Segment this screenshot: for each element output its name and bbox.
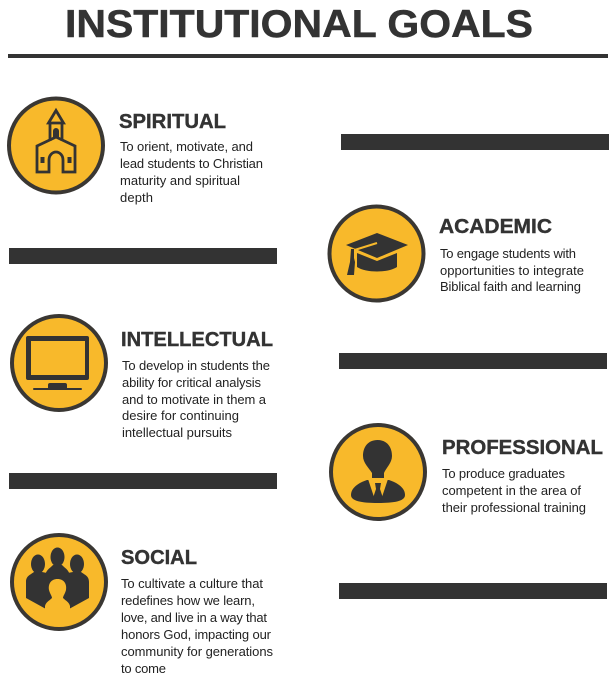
title: INSTITUTIONAL GOALS [65, 3, 533, 46]
panel: spiritual [9, 98, 263, 205]
description: their professional training [442, 500, 586, 515]
description: honors God, impacting our [121, 627, 272, 642]
description [120, 139, 263, 205]
heading: INTELLECTUAL [121, 328, 273, 351]
description: lead students to Christian [120, 156, 263, 171]
heading: ACADEMIC [439, 215, 552, 238]
description: redefines how we learn, [121, 593, 255, 608]
icon: graduation cap [330, 206, 424, 300]
panel: academic [330, 206, 584, 300]
description: To cultivate a culture that [121, 576, 263, 591]
description: to come [121, 661, 166, 676]
description: competent in the area of [442, 483, 581, 498]
description: and to motivate in them a [122, 392, 267, 407]
panel: professional [331, 425, 603, 519]
heading: PROFESSIONAL [442, 436, 603, 459]
icon: computer monitor [12, 316, 106, 410]
description: ability for critical analysis [122, 375, 262, 390]
description [121, 576, 274, 676]
description: To orient, motivate, and [120, 139, 253, 154]
description: To develop in students the [122, 358, 270, 373]
description: To produce graduates [442, 466, 566, 481]
heading: SOCIAL [121, 546, 197, 569]
description [122, 358, 270, 440]
icon: group of people [12, 535, 106, 629]
panel: social [12, 535, 274, 676]
heading: SPIRITUAL [119, 110, 226, 133]
description: community for generations [121, 644, 274, 659]
description: maturity and spiritual [120, 173, 240, 188]
panel: intellectual [12, 316, 273, 440]
icon: person in suit [331, 425, 425, 519]
description: desire for continuing [122, 408, 239, 423]
description: opportunities to integrate [440, 263, 584, 278]
description: Biblical faith and learning [440, 279, 581, 294]
description: intellectual pursuits [122, 425, 232, 440]
description [440, 246, 584, 294]
description: love, and live in a way that [121, 610, 267, 625]
description: depth [120, 190, 153, 205]
description: To engage students with [440, 246, 576, 261]
icon: church [9, 98, 103, 192]
description [442, 466, 586, 515]
